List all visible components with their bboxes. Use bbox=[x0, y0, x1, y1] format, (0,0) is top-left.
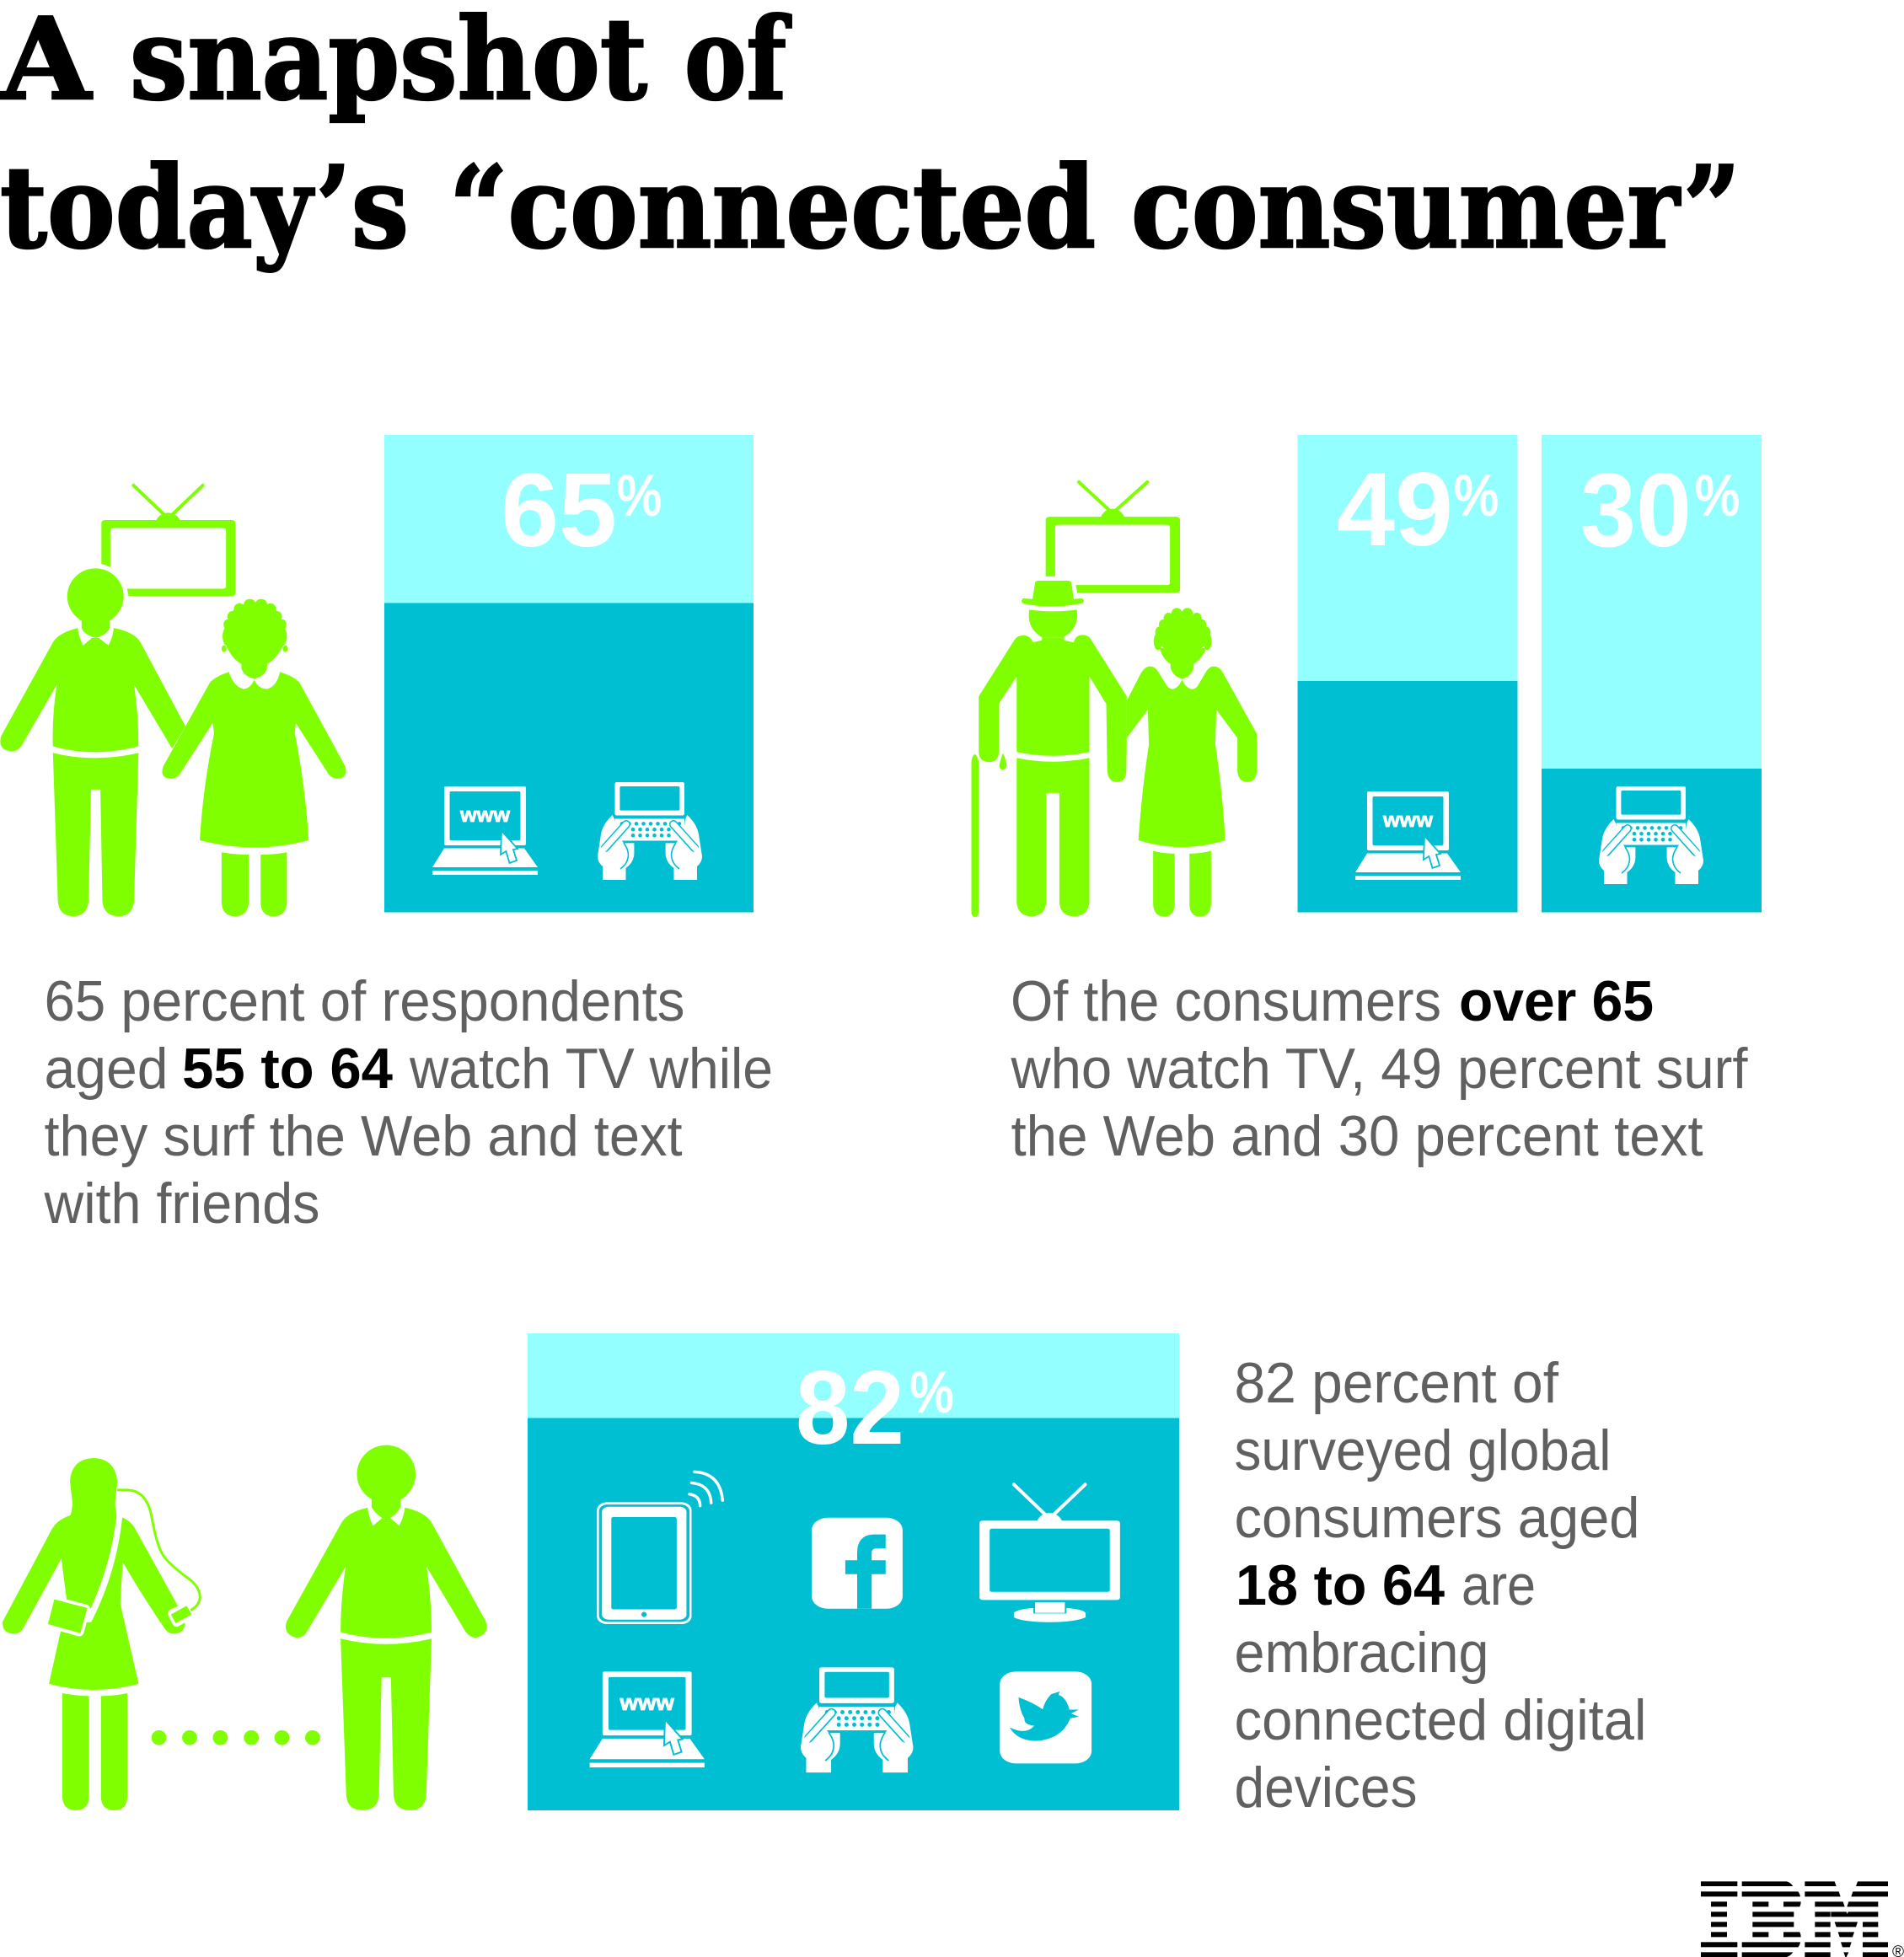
icon: laptop with www: www bbox=[619, 1690, 675, 1715]
text block: 55 to 64: they surf the Web and text bbox=[44, 1104, 683, 1168]
icon: laptop with www: www bbox=[1382, 809, 1433, 832]
text block: 18 to 64: embracing bbox=[1234, 1621, 1488, 1685]
bar chart: 30 percent bbox=[1542, 435, 1762, 912]
stat: 30%: 30 bbox=[1580, 453, 1692, 569]
panel: devices bar 82 percent bbox=[528, 1333, 1179, 1810]
text block: 18 to 64: connected digital bbox=[1234, 1688, 1647, 1752]
bar chart: 49 percent bbox=[1298, 435, 1517, 912]
figure: man bbox=[286, 1445, 487, 1810]
text block: 18 to 64: devices bbox=[1234, 1756, 1418, 1820]
panel: over 65 bbox=[971, 435, 1762, 1168]
text block: 55 to 64: with friends bbox=[44, 1172, 320, 1236]
figure: woman bbox=[162, 599, 346, 916]
icon: laptop with www bbox=[590, 1671, 705, 1767]
stat: 30%: % bbox=[1695, 464, 1740, 528]
dotted connection line bbox=[152, 1730, 320, 1745]
text block: 18 to 64 bbox=[1234, 1351, 1647, 1820]
text block: over 65: Of the consumers bbox=[1011, 969, 1441, 1033]
text block: 18 to 64: surveyed global bbox=[1234, 1418, 1612, 1482]
icon: television bbox=[1046, 482, 1180, 592]
icon: laptop with www bbox=[432, 786, 538, 875]
icon: laptop with www bbox=[1355, 791, 1461, 880]
device icons bbox=[590, 1472, 1120, 1772]
icon: Twitter bbox=[1000, 1671, 1091, 1763]
title: consumer” bbox=[1131, 141, 1740, 274]
stat: 82%: % bbox=[910, 1360, 954, 1424]
icon: hands typing bbox=[801, 1667, 913, 1772]
text block: 18 to 64: consumers aged bbox=[1234, 1486, 1640, 1550]
icon: laptop with www: www bbox=[459, 804, 510, 827]
figure: man with hat and cane bbox=[971, 581, 1127, 917]
bar chart: 65 percent bbox=[384, 435, 754, 912]
stat: 65%: 65 bbox=[501, 453, 617, 569]
logo: IBM bbox=[1701, 1881, 1904, 1957]
text block: 18 to 64: 82 percent of bbox=[1234, 1351, 1558, 1415]
icon: Facebook bbox=[812, 1518, 903, 1609]
stat: 49%: 49 bbox=[1337, 452, 1453, 568]
icon: flat-screen TV bbox=[979, 1484, 1120, 1622]
illustration: connected young consumers bbox=[3, 1445, 487, 1810]
icon: hands typing bbox=[598, 782, 702, 880]
text block: 18 to 64: are bbox=[1462, 1553, 1536, 1617]
text block: 18 to 64: 18 to 64 bbox=[1236, 1553, 1445, 1617]
figure: senior woman bbox=[1127, 608, 1257, 917]
text block: 55 to 64: watch TV while bbox=[409, 1037, 773, 1101]
text block: over 65: over 65 bbox=[1459, 969, 1654, 1033]
icon: tablet with wifi bbox=[597, 1472, 722, 1624]
illustration: couple watching TV bbox=[0, 485, 346, 916]
text block: 55 to 64: aged bbox=[44, 1037, 169, 1101]
stat: 65%: % bbox=[617, 464, 662, 528]
title: today’s bbox=[0, 141, 409, 274]
text block: over 65: the Web and 30 percent text bbox=[1011, 1104, 1703, 1168]
panel: aged 55 to 64 bbox=[0, 435, 773, 1236]
figure: man bbox=[0, 568, 185, 916]
stat: 82%: 82 bbox=[796, 1350, 904, 1466]
title bbox=[0, 0, 1740, 274]
illustration: senior couple watching TV bbox=[971, 482, 1257, 917]
figure: woman with bag and phone bbox=[3, 1458, 200, 1810]
panel: aged 18 to 64 bbox=[3, 1333, 1646, 1820]
title: “connected bbox=[449, 141, 1096, 274]
text block: 55 to 64 bbox=[44, 969, 773, 1236]
icon: hands typing bbox=[1599, 786, 1703, 884]
stat: 49%: % bbox=[1454, 464, 1499, 528]
text block: 55 to 64: 65 percent of respondents bbox=[44, 969, 684, 1033]
text block: over 65: who watch TV, 49 percent surf bbox=[1011, 1037, 1748, 1101]
icon: television bbox=[101, 485, 235, 596]
text block: over 65 bbox=[1011, 969, 1748, 1168]
text block: 55 to 64: 55 to 64 bbox=[182, 1037, 393, 1101]
